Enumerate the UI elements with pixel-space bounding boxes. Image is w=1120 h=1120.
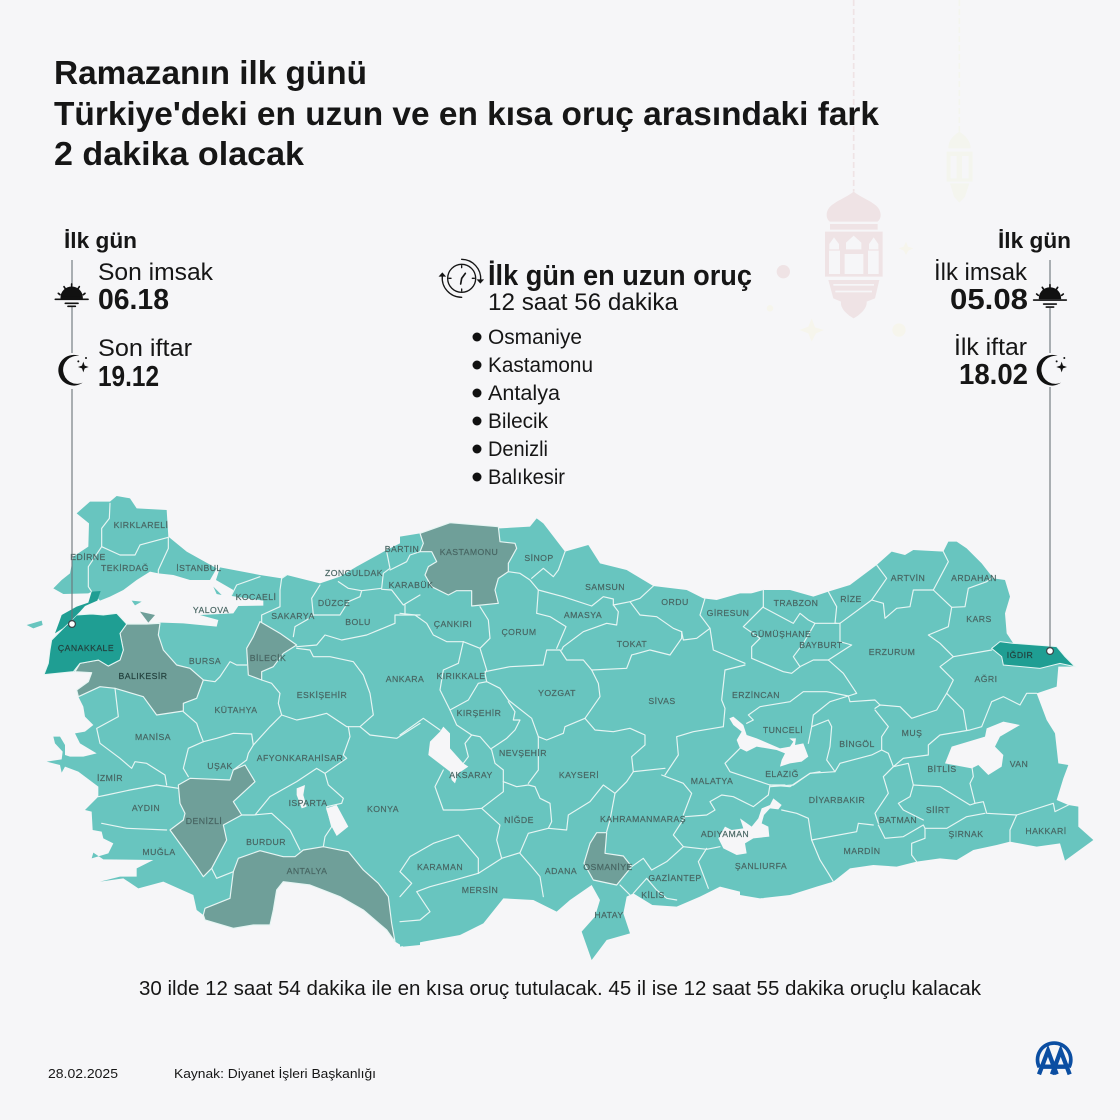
province labels: TUNCELİ [763, 725, 803, 735]
province labels: HAKKARİ [1025, 826, 1067, 836]
province labels: TRABZON [774, 598, 818, 608]
list of provinces: Denizli [488, 438, 548, 461]
province labels: BAYBURT [799, 640, 843, 650]
title [54, 54, 880, 172]
province labels: ŞANLIURFA [735, 861, 787, 871]
province labels: BOLU [345, 617, 371, 627]
province labels: ERZURUM [869, 647, 915, 657]
province labels: KÜTAHYA [215, 705, 257, 715]
province labels: DÜZCE [318, 598, 350, 608]
province labels: NEVŞEHİR [499, 748, 547, 758]
province labels: ÇANAKKALE [58, 643, 114, 653]
text: ilk iftar: 18.02 [959, 359, 1028, 391]
province borders [88, 503, 1068, 922]
province labels: KAHRAMANMARAŞ [600, 814, 686, 824]
text: ilk imsak [934, 259, 1028, 316]
province labels: DİYARBAKIR [809, 795, 865, 805]
province labels: KARS [966, 614, 992, 624]
province labels: KONYA [367, 804, 399, 814]
province labels: BATMAN [879, 815, 917, 825]
province labels: MUŞ [902, 728, 922, 738]
province labels: KIRŞEHİR [457, 708, 501, 718]
connector line: right [1049, 260, 1051, 648]
province labels: AMASYA [564, 610, 602, 620]
text: ilk imsak: İlk imsak [934, 259, 1028, 286]
province labels: SAMSUN [585, 582, 625, 592]
bottom note: 30 ilde 12 saat 54 dakika ile en kısa oruç tutulacak. 45 il ise 12 saat 55 dakika oruçlu kalacak [139, 978, 982, 1000]
province labels: AĞRI [974, 674, 998, 684]
text: son imsak: 06.18 [98, 284, 169, 316]
province labels: ÇANKIRI [434, 619, 472, 629]
province labels: İZMİR [97, 773, 123, 783]
province labels: SİİRT [926, 805, 950, 815]
province labels: KARABÜK [389, 580, 433, 590]
marker: right dot [1047, 648, 1053, 654]
list of provinces: Balıkesir [488, 466, 565, 489]
province labels: RİZE [840, 594, 862, 604]
list of provinces: Bilecik [488, 410, 548, 433]
province labels: MALATYA [691, 776, 733, 786]
province labels: UŞAK [207, 761, 233, 771]
map of Turkey [27, 496, 1093, 960]
province labels: MARDİN [844, 846, 880, 856]
text: ilk iftar: İlk iftar [954, 334, 1027, 361]
list of provinces: Kastamonu [488, 354, 593, 377]
title: Ramazanın ilk günü [54, 54, 367, 91]
province labels: BARTIN [385, 544, 419, 554]
highlighted provinces: longest fast [75, 523, 632, 942]
province labels: ANKARA [386, 674, 424, 684]
source: Kaynak: Diyanet İşleri Başkanlığı [174, 1066, 376, 1081]
heading: İlk gün (left): İlk gün [64, 228, 137, 253]
heading: İlk gün (right): İlk gün [998, 228, 1071, 253]
connector line: left [71, 260, 73, 621]
province labels: ÇORUM [501, 627, 537, 637]
land: east [740, 542, 1093, 898]
province labels: DENİZLİ [186, 816, 222, 826]
province: Kastamonu [420, 523, 517, 606]
province labels: ADANA [545, 866, 577, 876]
text: son iftar: Son iftar [98, 335, 192, 362]
title: Türkiye'deki en uzun ve en kısa oruç arasındaki fark [54, 95, 880, 132]
province labels: SİNOP [524, 553, 554, 563]
province labels: YOZGAT [538, 688, 576, 698]
province labels: GÜMÜŞHANE [751, 629, 811, 639]
province: Antalya [203, 847, 395, 942]
province: Osmaniye [584, 833, 632, 885]
province labels: OSMANİYE [583, 862, 633, 872]
province labels: BİLECİK [250, 653, 286, 663]
province labels: ARDAHAN [951, 573, 997, 583]
heading: longest fast: İlk gün en uzun oruç [488, 260, 752, 292]
province labels: ANTALYA [287, 866, 327, 876]
province labels: AFYONKARAHİSAR [257, 753, 343, 763]
text: ilk iftar [954, 334, 1028, 391]
land: centre [400, 518, 763, 960]
right panel: easternmost times [934, 228, 1071, 654]
province labels: SAKARYA [271, 611, 315, 621]
province labels: VAN [1010, 759, 1028, 769]
icon: crescent moon [58, 355, 89, 386]
province labels: TEKİRDAĞ [101, 563, 149, 573]
text: son imsak [98, 259, 214, 316]
province labels: KIRIKKALE [437, 671, 485, 681]
province labels [58, 520, 1067, 920]
province labels: KIRKLARELİ [114, 520, 168, 530]
lakes [297, 717, 1020, 855]
list of provinces: Antalya [488, 382, 560, 405]
province labels: BURDUR [246, 837, 286, 847]
text: son iftar: 19.12 [98, 361, 159, 393]
province labels: EDİRNE [70, 552, 106, 562]
province labels: ELAZIĞ [765, 769, 799, 779]
province labels: BİNGÖL [839, 739, 875, 749]
text: son imsak: Son imsak [98, 259, 214, 286]
province labels: KARAMAN [417, 862, 463, 872]
text: son iftar [98, 335, 192, 393]
province labels: KOCAELİ [236, 592, 276, 602]
province labels: ARTVİN [891, 573, 925, 583]
province labels: IĞDIR [1007, 650, 1033, 660]
land: west [27, 496, 420, 947]
duration text: 12 saat 56 dakika [488, 289, 679, 316]
province labels: NİĞDE [504, 815, 534, 825]
province labels: BURSA [189, 656, 221, 666]
date: 28.02.2025 [48, 1066, 118, 1081]
province labels: YALOVA [193, 605, 229, 615]
province labels: KAYSERİ [559, 770, 599, 780]
list of provinces [472, 326, 593, 489]
province: Bilecik [247, 622, 297, 680]
province labels: KASTAMONU [440, 547, 498, 557]
province: Çanakkale (westernmost) [44, 591, 127, 675]
province labels: ZONGULDAK [325, 568, 383, 578]
province labels: KİLİS [641, 890, 665, 900]
province labels: ESKİŞEHİR [297, 690, 347, 700]
list of provinces: Osmaniye [488, 326, 582, 349]
province labels: SİVAS [648, 696, 676, 706]
province labels: TOKAT [617, 639, 647, 649]
icon: crescent moon (right) [1037, 355, 1067, 386]
province labels: GAZİANTEP [648, 873, 702, 883]
decorative lanterns [767, 0, 973, 342]
title: 2 dakika olacak [54, 135, 305, 172]
province labels: GİRESUN [707, 608, 749, 618]
province labels: BİTLİS [927, 764, 957, 774]
province labels: MUĞLA [142, 847, 176, 857]
province labels: ISPARTA [289, 798, 327, 808]
province labels: MANİSA [135, 732, 171, 742]
province labels: ADIYAMAN [701, 829, 749, 839]
province: Balıkesir [75, 612, 203, 715]
icon: clock [440, 259, 483, 297]
marker: left dot [69, 621, 75, 627]
centre panel: longest fast [440, 259, 752, 489]
logo: AA [1037, 1043, 1071, 1074]
icon: sunrise [55, 284, 88, 306]
province labels: ŞIRNAK [948, 829, 984, 839]
province labels: HATAY [594, 910, 624, 920]
text: ilk imsak: 05.08 [950, 284, 1028, 316]
province labels: MERSİN [462, 885, 498, 895]
province labels: AYDIN [132, 803, 160, 813]
province labels: ERZİNCAN [732, 690, 780, 700]
province: Iğdır (easternmost) [992, 642, 1075, 668]
province: Denizli [170, 765, 255, 877]
left panel: westernmost times [55, 228, 214, 627]
province labels: BALIKESİR [119, 671, 167, 681]
province labels: AKSARAY [449, 770, 493, 780]
province labels: İSTANBUL [176, 563, 222, 573]
province labels: ORDU [661, 597, 689, 607]
icon: sunrise (right) [1034, 285, 1066, 307]
